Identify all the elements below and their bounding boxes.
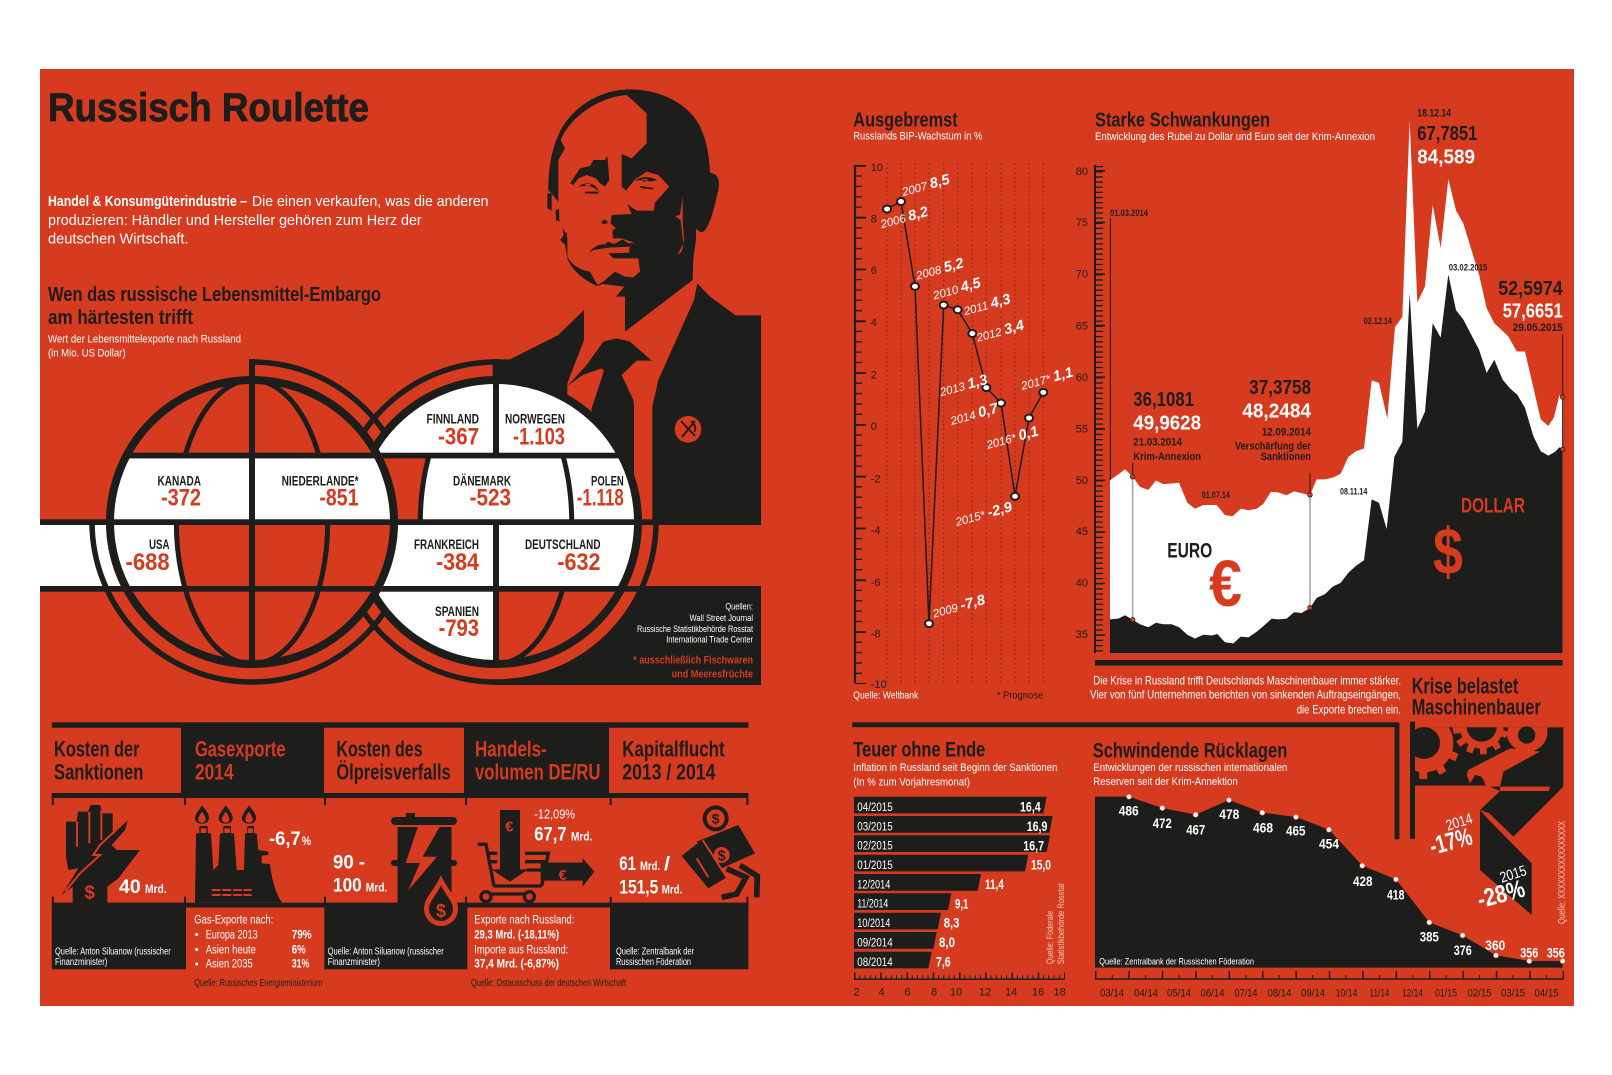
subheading: inflation: (In % zum Vorjahresmonat) (853, 776, 970, 788)
icon: gas factory (195, 805, 282, 903)
globe footnote: * ausschließlich Fischwaren (633, 654, 753, 666)
reserves area chart: 10/14 (1336, 988, 1358, 1000)
globe footnote (633, 654, 753, 680)
inflation bar chart: 03/2015 (857, 821, 893, 833)
inflation bar chart: 10/2014 (857, 918, 891, 930)
inflation bar chart: 8 (931, 986, 937, 998)
icon: shopping cart with arrows: € (559, 868, 567, 884)
column headings: 2014 (195, 759, 234, 784)
gas export table: Europa 2013 (206, 929, 258, 941)
icon: oil barrel (391, 813, 458, 926)
inflation bar chart: 12 (979, 986, 991, 998)
inflation bar chart: 4 (878, 986, 885, 998)
reserves area chart: 376 (1454, 942, 1472, 958)
reserves area chart: 02/15 (1468, 988, 1492, 1000)
country labels: KANADA (158, 474, 201, 489)
ruble area chart: 75 (1076, 217, 1088, 229)
country values: -1.118 (577, 485, 624, 512)
reserves area chart: Quelle: Zentralbank der Russischen Föderation (1099, 956, 1254, 967)
country values: -688 (126, 549, 170, 576)
ruble labels: 12.09.2014 (1262, 426, 1312, 438)
title: Russisch Roulette (48, 86, 369, 130)
reserves area chart: 04/15 (1534, 988, 1558, 1000)
inflation bar chart: 10 (950, 986, 962, 998)
GDP line chart: 2016* 0,1 (984, 424, 1040, 453)
gas export table: Gas-Exporte nach: (194, 914, 273, 926)
inflation bar chart: 01/2015 (857, 860, 893, 872)
intro text: deutschen Wirtschaft. (48, 232, 188, 248)
subheading: ruble: Entwicklung des Rubel zu Dollar und Euro seit der Krim-Annexion (1095, 131, 1375, 143)
column headings: Kapitalflucht (622, 737, 725, 762)
trade table: Importe aus Russland: (474, 944, 568, 956)
GDP line chart: 2 (871, 370, 877, 382)
GDP line chart: 2010 4,5 (930, 275, 984, 304)
reserves area chart: 467 (1186, 821, 1205, 837)
GDP line chart: 4 (871, 317, 877, 329)
embargo heading: am härtesten trifft (48, 307, 193, 329)
globe sources: International Trade Center (666, 634, 753, 644)
reserves area chart: 428 (1353, 873, 1373, 889)
icon: running money: $ (718, 849, 726, 865)
subheading: GDP: Russlands BIP-Wachstum in % (853, 130, 982, 142)
column headings: Ölpreisverfalls (336, 759, 451, 784)
country values (126, 424, 624, 642)
trade table: 37,4 Mrd. (-6,87%) (474, 959, 559, 971)
white stripe left of globe (40, 522, 150, 589)
trade table: 29,3 Mrd. (-18,11%) (474, 929, 559, 941)
ruble labels: 57,6651 (1503, 301, 1563, 323)
ruble area chart: 65 (1076, 321, 1088, 333)
source box (493, 592, 761, 685)
inflation bar chart: 18 (1054, 986, 1066, 998)
inflation bar chart: 16,7 (1023, 838, 1044, 853)
subheading: reserves: Entwicklungen der russischen internationalen (1093, 762, 1287, 774)
column headings: 2013 / 2014 (622, 759, 716, 784)
gas export table: Asien 2035 (206, 959, 253, 971)
GDP source: Quelle: Weltbank (853, 690, 919, 702)
inflation bar chart: 11/2014 (857, 899, 889, 911)
inflation bar chart: 16 (1032, 986, 1044, 998)
inflation bar chart (854, 797, 1066, 998)
globes chart (40, 359, 659, 685)
icon: shopping cart with arrows (478, 810, 594, 902)
ruble labels: 08.11.14 (1340, 486, 1367, 496)
country values: -372 (161, 485, 201, 512)
reserves area chart: 01/15 (1435, 988, 1457, 1000)
source: capital flight: Quelle: Zentralbank der (616, 947, 694, 958)
ruble labels: 01.07.14 (1202, 490, 1230, 500)
source: gas: Quelle: Russisches Energieministerium (194, 978, 322, 989)
value: 2014 -17%: 2014 (1444, 810, 1475, 835)
value: 2014 -17%: -17% (1427, 823, 1475, 861)
reserves area chart: 356 (1547, 944, 1565, 960)
inflation bar chart: 7,6 (936, 955, 951, 970)
GDP line chart: 2015* -2,9 (953, 499, 1014, 530)
value: 2015 -28%: -28% (1474, 875, 1528, 914)
country labels: POLEN (591, 474, 624, 489)
ruble labels: DOLLAR (1461, 494, 1525, 518)
embargo heading: Wen das russische Lebensmittel-Embargo (48, 284, 381, 306)
GDP line chart: 0 (871, 421, 877, 433)
inflation bar chart: 6 (904, 986, 911, 998)
globe sources (637, 601, 753, 644)
country values: -1.103 (513, 424, 565, 450)
reserves area chart: 468 (1253, 820, 1273, 836)
heading: Krise belastet Maschinenbauer (1412, 673, 1541, 719)
reserves area chart: 472 (1153, 815, 1172, 831)
reserves area chart: 465 (1286, 823, 1306, 839)
column headings: Kosten der (54, 737, 140, 762)
country labels: DEUTSCHLAND (525, 537, 601, 552)
reserves area chart: 486 (1119, 803, 1139, 819)
trade table (474, 914, 574, 971)
reserves area chart: 05/14 (1167, 988, 1191, 1000)
ruble labels: EURO (1167, 540, 1212, 563)
source: inflation: Quelle: Föderale (1045, 911, 1056, 964)
trade table: Exporte nach Russland: (474, 914, 574, 926)
GDP forecast note: * Prognose (997, 690, 1043, 702)
embargo subheading: Wert der Lebensmittelexporte nach Russland (48, 334, 241, 346)
globe sources: Wall Street Journal (690, 613, 753, 623)
value: sanctions cost: 40 (119, 877, 141, 898)
illustration: head portrait (547, 89, 719, 332)
ruble area chart (1076, 107, 1565, 666)
GDP line chart: 2007 8,5 (899, 172, 953, 200)
ruble area chart: 45 (1076, 526, 1088, 538)
source: oil: Quelle: Anton Siluanow (russischer (328, 947, 444, 958)
reserves area chart: 418 (1387, 887, 1405, 903)
inflation bar chart: 8,0 (939, 935, 955, 950)
country values: -851 (319, 485, 359, 512)
GDP line chart (855, 162, 1075, 691)
value: trade volume (534, 806, 592, 846)
value: capital flight: / (664, 854, 671, 875)
ruble labels: 01.03.2014 (1110, 208, 1148, 218)
reserves area chart: 06/14 (1200, 988, 1224, 1000)
country labels: FINNLAND (426, 412, 479, 427)
value: trade volume: -12,09% (534, 806, 575, 821)
panel: bottom cost strip frame (52, 722, 748, 969)
inflation bar chart: 12/2014 (857, 879, 891, 891)
column headings: Handels- (475, 737, 547, 762)
source: oil: Finanzminister) (328, 957, 380, 968)
heading: Starke Schwankungen: Starke Schwankungen (1095, 110, 1270, 132)
ruble area chart: 50 (1076, 475, 1088, 487)
reserves area chart: 12/14 (1402, 988, 1423, 1000)
inflation bar chart: 09/2014 (857, 937, 893, 949)
inflation bar chart: 11,4 (985, 877, 1004, 892)
inflation bar chart: 14 (1005, 986, 1017, 998)
ruble labels: 18.12.14 (1417, 107, 1452, 119)
right globe cells (378, 384, 634, 660)
country labels: SPANIEN (435, 604, 479, 619)
country values: -384 (436, 549, 480, 576)
reserves area chart: 454 (1319, 836, 1339, 852)
GDP line chart: 10 (871, 162, 883, 174)
ruble labels: 03.02.2015 (1449, 263, 1487, 273)
reserves area chart: 07/14 (1234, 988, 1258, 1000)
ruble area chart: 35 (1076, 629, 1088, 641)
ruble labels: € (1209, 546, 1242, 620)
subheading: reserves: Reserven seit der Krim-Annektion (1093, 776, 1238, 788)
value: capital flight: Mrd. (662, 882, 682, 896)
source: oil (328, 947, 444, 968)
reserves area chart: 03/14 (1100, 988, 1124, 1000)
reserves area chart: 04/14 (1134, 988, 1158, 1000)
GDP line chart: 2013 1,3 (937, 372, 989, 400)
frame around lower right charts (852, 725, 1397, 839)
value: capital flight: 61 (619, 854, 636, 875)
machine builders paragraph: Vier von fünf Unternehmen berichten von sinkenden Auftragseingängen, (1090, 688, 1401, 702)
value: oil cost: 90 - (333, 852, 365, 873)
icon: oil barrel: $ (436, 901, 446, 921)
machine builders paragraph (1090, 673, 1401, 716)
ruble area chart: 70 (1076, 268, 1088, 280)
ruble labels: 36,1081 (1133, 389, 1194, 411)
icon: breaking hand: $ (84, 881, 95, 902)
ruble area chart: 60 (1076, 372, 1088, 384)
subheading: inflation: Inflation in Russland seit Beginn der Sanktionen (853, 762, 1057, 774)
value: oil cost (333, 852, 387, 897)
ruble labels: Verschärfung der (1235, 441, 1312, 453)
GDP line chart: 6 (871, 265, 877, 277)
embargo subheading (48, 334, 241, 360)
inflation bar chart: 15,0 (1031, 858, 1051, 873)
heading: Krise belastet Maschinenbauer: Maschinenbauer (1412, 694, 1541, 719)
icon: running money: $ (712, 810, 720, 826)
value: trade volume: 67,7 (534, 825, 567, 846)
source: capital flight: Russischen Föderation (616, 957, 691, 968)
country values: -632 (557, 549, 600, 576)
heading: Krise belastet Maschinenbauer: Krise belastet (1412, 673, 1519, 698)
reserves area chart: 385 (1420, 929, 1439, 945)
value: sanctions cost (119, 877, 167, 898)
value: trade volume: Mrd. (571, 830, 592, 844)
GDP line chart: -8 (871, 628, 880, 640)
ruble labels: 84,589 (1417, 146, 1475, 168)
subheading: reserves (1093, 762, 1287, 788)
country values: -523 (470, 485, 511, 512)
column headings: volumen DE/RU (475, 759, 600, 784)
ruble area chart: 55 (1076, 423, 1088, 435)
GDP line chart: 2006 8,2 (878, 204, 930, 232)
source: inflation: Statistikbehörde Rosstat (1056, 883, 1067, 964)
gas export table: Asien heute (206, 944, 256, 956)
inflation bar chart: 2 (854, 986, 860, 998)
ruble area chart: 40 (1076, 578, 1088, 590)
inflation bar chart: 9,1 (955, 896, 969, 911)
ruble labels: 29.05.2015 (1513, 322, 1563, 334)
GDP line chart: 2017* 1,1 (1018, 365, 1075, 394)
GDP line chart: 2011 4,3 (961, 291, 1013, 319)
inflation bar chart: 16,4 (1020, 800, 1041, 815)
country labels: NORWEGEN (505, 412, 565, 427)
value: 2015 -28%: 2015 (1498, 862, 1529, 887)
icon: running money (682, 805, 757, 897)
ruble labels: 49,9628 (1133, 412, 1201, 434)
intro text: Die einen verkaufen, was die anderen (252, 194, 488, 210)
ruble labels: $ (1433, 514, 1463, 588)
column headings: Gasexporte (195, 737, 286, 762)
source: machine builders: Quelle: XXXXXXXXXXXXXXXX (1557, 821, 1568, 924)
inflation bar chart: 02/2015 (857, 841, 893, 853)
globe sources: Russische Statistikbehörde Rosstat (637, 624, 753, 634)
heading: Ausgebremst: Ausgebremst (853, 109, 958, 131)
inflation bar chart: 16,9 (1027, 819, 1047, 834)
value: 2014 -17% (1427, 810, 1475, 861)
machine builders paragraph: Die Krise in Russland trifft Deutschlands Maschinenbauer immer stärker. (1093, 673, 1401, 687)
intro text (48, 194, 488, 248)
column headings (54, 737, 725, 784)
ruble labels: Sanktionen (1261, 451, 1311, 463)
GDP line chart: -2 (871, 474, 880, 486)
GDP line chart: 8 (871, 213, 877, 225)
ruble labels: 02.12.14 (1364, 316, 1392, 326)
source: sanctions (55, 947, 171, 968)
value: oil cost: Mrd. (366, 881, 387, 895)
embargo subheading: (in Mio. US Dollar) (48, 348, 126, 360)
country labels: NIEDERLANDE* (282, 474, 359, 489)
country labels: FRANKREICH (414, 537, 479, 552)
GDP line chart: -4 (871, 525, 880, 537)
intro text: produzieren: Händler und Hersteller gehören zum Herz der (48, 213, 422, 229)
GDP line chart: 2009 -7,8 (930, 592, 988, 622)
ruble labels: Krim-Annexion (1133, 451, 1201, 463)
embargo heading (48, 284, 381, 329)
illustration: suit and tie (493, 283, 761, 525)
ruble area chart: 80 (1076, 166, 1088, 178)
intro text: Handel & Konsumgüterindustrie – (48, 194, 247, 210)
country labels (149, 412, 624, 619)
inflation bar chart: 08/2014 (857, 957, 893, 969)
gas export table: 31% (292, 959, 309, 971)
country labels: DÄNEMARK (453, 474, 511, 489)
heading: Teuer ohne Ende: Teuer ohne Ende (853, 739, 985, 762)
value: capital flight: 151,5 (619, 877, 659, 898)
source: sanctions: Quelle: Anton Siluanow (russischer (55, 947, 171, 958)
source: trade: Quelle: Ostausschuss der deutschen Wirtschaft (471, 978, 626, 989)
country values: -367 (438, 424, 479, 450)
country labels: USA (149, 537, 170, 552)
reserves area chart: 356 (1520, 944, 1538, 960)
left globe cells (106, 376, 398, 668)
reserves area chart: 11/14 (1370, 988, 1390, 1000)
icon: breaking hand (62, 805, 140, 903)
reserves area chart: 478 (1219, 806, 1239, 822)
column headings: Sanktionen (54, 759, 143, 784)
GDP line chart: -6 (871, 577, 880, 589)
GDP line chart: 2014 0,7 (948, 401, 1001, 429)
value: gas exports: -6,7 (269, 829, 301, 850)
subheading: inflation (853, 762, 1057, 788)
source: inflation (1045, 883, 1067, 964)
machine builders paragraph: die Exporte brechen ein. (1297, 702, 1401, 716)
value: gas exports: % (302, 834, 311, 848)
GDP line chart: -10 (871, 679, 887, 691)
column headings: Kosten des (336, 737, 423, 762)
icon: lapel pin (675, 416, 701, 443)
country values: -793 (439, 615, 479, 642)
reserves area chart (1095, 794, 1565, 1000)
inflation bar chart: 8,3 (944, 916, 960, 931)
gas export table (194, 914, 312, 971)
heading: Schwindende Rücklagen: Schwindende Rücklagen (1093, 739, 1287, 762)
reserves area chart: 03/15 (1501, 988, 1525, 1000)
value: oil cost: 100 (333, 876, 362, 897)
icon: gears and wrench (1410, 722, 1564, 915)
source: sanctions: Finanzminister) (55, 957, 107, 968)
GDP line chart: 2008 5,2 (913, 255, 966, 284)
ruble labels: 37,3758 (1249, 377, 1311, 399)
reserves area chart: 09/14 (1301, 988, 1325, 1000)
ruble labels: 21.03.2014 (1133, 436, 1183, 448)
inflation bar chart: 04/2015 (857, 802, 893, 814)
gas export table: 6% (292, 944, 306, 956)
ruble labels: 52,5974 (1498, 278, 1563, 300)
reserves area chart: 08/14 (1268, 988, 1292, 1000)
source: capital flight (616, 947, 694, 968)
GDP line chart: 2012 3,4 (974, 318, 1026, 346)
value: capital flight (619, 854, 682, 898)
reserves area chart: 360 (1485, 937, 1505, 953)
gas export table: 79% (292, 929, 312, 941)
value: sanctions cost: Mrd. (145, 882, 167, 896)
ruble labels: 48,2484 (1242, 400, 1312, 422)
ruble labels: 67,7851 (1417, 123, 1477, 145)
ruble labels (1110, 107, 1563, 620)
value: capital flight: Mrd. (640, 859, 660, 873)
globe sources: Quellen: (725, 601, 753, 611)
icon: shopping cart with arrows: € (505, 820, 513, 836)
globe footnote: und Meeresfrüchte (672, 668, 753, 680)
